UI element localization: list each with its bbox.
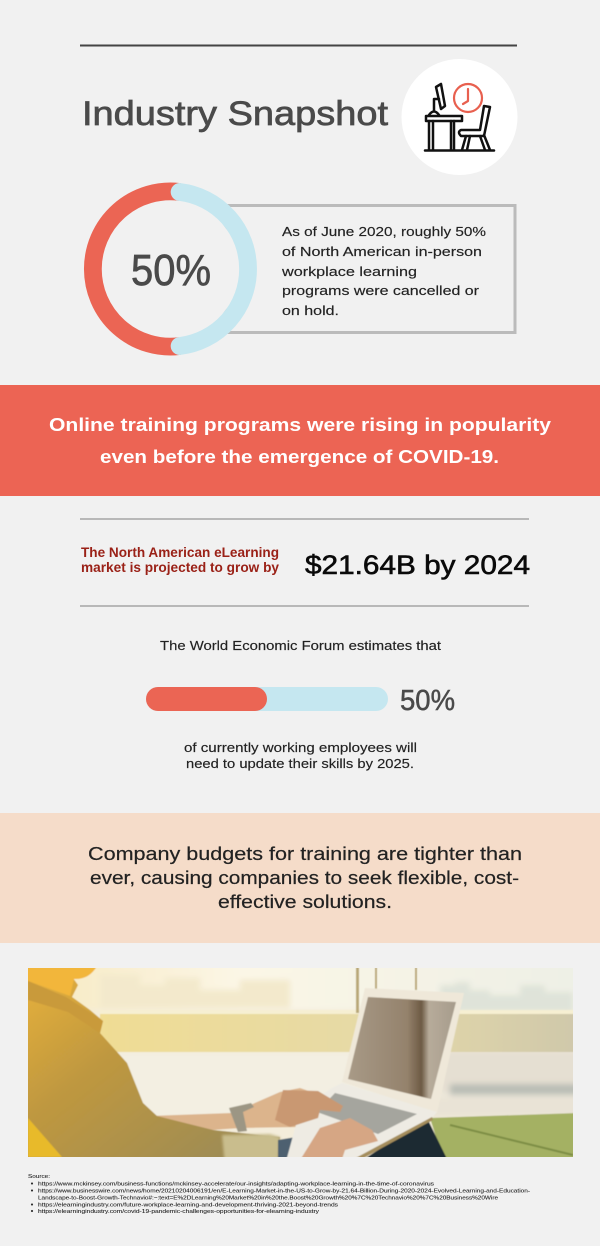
- sources: [28, 1174, 530, 1215]
- banner text: Online training programs were rising in popularity: [49, 414, 552, 435]
- statistic description: of North American in-person: [282, 244, 482, 259]
- red banner: [0, 385, 600, 496]
- banner text: even before the emergence of COVID-19.: [100, 446, 499, 467]
- icon: desk, chair and clock: [402, 59, 518, 175]
- source list: [31, 1182, 530, 1215]
- statistic description: workplace learning: [281, 264, 417, 279]
- market label: market is projected to grow by: [81, 560, 279, 575]
- peach banner: [0, 813, 600, 943]
- source list: https://www.mckinsey.com/business-functions/mckinsey-accelerate/our-insights/adapting-workplace-learning-in-the-time-of-coronavirus: [38, 1182, 434, 1188]
- World Economic Forum statistic: [146, 638, 455, 771]
- market label: The North American eLearning: [81, 545, 279, 560]
- source list: https://elearningindustry.com/future-workplace-learning-and-development-thriving-2021-beyond-trends: [38, 1202, 338, 1208]
- title: Industry Snapshot: [82, 95, 389, 133]
- progress value: 50%: [400, 685, 455, 717]
- wristwatch: [229, 1103, 254, 1132]
- budget text: ever, causing companies to seek flexible, cost-: [90, 867, 519, 888]
- source heading: Source:: [28, 1174, 50, 1180]
- outro text: [184, 740, 417, 771]
- market label: [81, 545, 279, 575]
- source list: Landscape-to-Boost-Growth-Technavio#:~:text=E%2DLearning%20Market%20in%20the.Boost%20Growth%20%7C%20Technavio%20%7C%20Business%20Wire: [38, 1196, 498, 1202]
- progress bar: [146, 687, 388, 711]
- statistic description: on hold.: [282, 303, 339, 318]
- source list: https://elearningindustry.com/covid-19-pandemic-challenges-opportunities-for-elearning-industry: [38, 1209, 319, 1215]
- window beam: [100, 1013, 580, 1052]
- statistic description: As of June 2020, roughly 50%: [282, 224, 487, 239]
- statistic description: programs were cancelled or: [282, 283, 480, 298]
- grass: [430, 1112, 573, 1157]
- forearm: [156, 1088, 308, 1131]
- donut value: 50%: [131, 246, 211, 295]
- budget text: [88, 843, 522, 912]
- donut chart: [93, 191, 248, 347]
- statistic description: [281, 224, 487, 318]
- banner text: [49, 414, 552, 467]
- outro text: of currently working employees will: [184, 740, 417, 755]
- market growth section: [80, 518, 530, 607]
- budget text: Company budgets for training are tighter than: [88, 843, 522, 864]
- market figure: $21.64B by 2024: [305, 550, 530, 580]
- outro text: need to update their skills by 2025.: [186, 756, 414, 771]
- hands: [275, 1090, 343, 1127]
- jeans: [366, 1122, 447, 1157]
- budget text: effective solutions.: [218, 891, 392, 912]
- panel: 50% cancelled statistic: [93, 191, 515, 347]
- intro text: The World Economic Forum estimates that: [160, 638, 441, 653]
- chair: [28, 1118, 62, 1157]
- photo: person using a laptop: [28, 968, 573, 1157]
- shirt: [28, 968, 293, 1157]
- text box outline: [225, 206, 515, 332]
- top rule: [80, 44, 517, 46]
- laptop: [285, 988, 464, 1165]
- source list: https://www.businesswire.com/news/home/20210204006191/en/E-Learning-Market-in-the-US-to-Grow-by-21.64-Billion-During-2020-2024-Evolved-Learning-and-Education-: [38, 1188, 530, 1194]
